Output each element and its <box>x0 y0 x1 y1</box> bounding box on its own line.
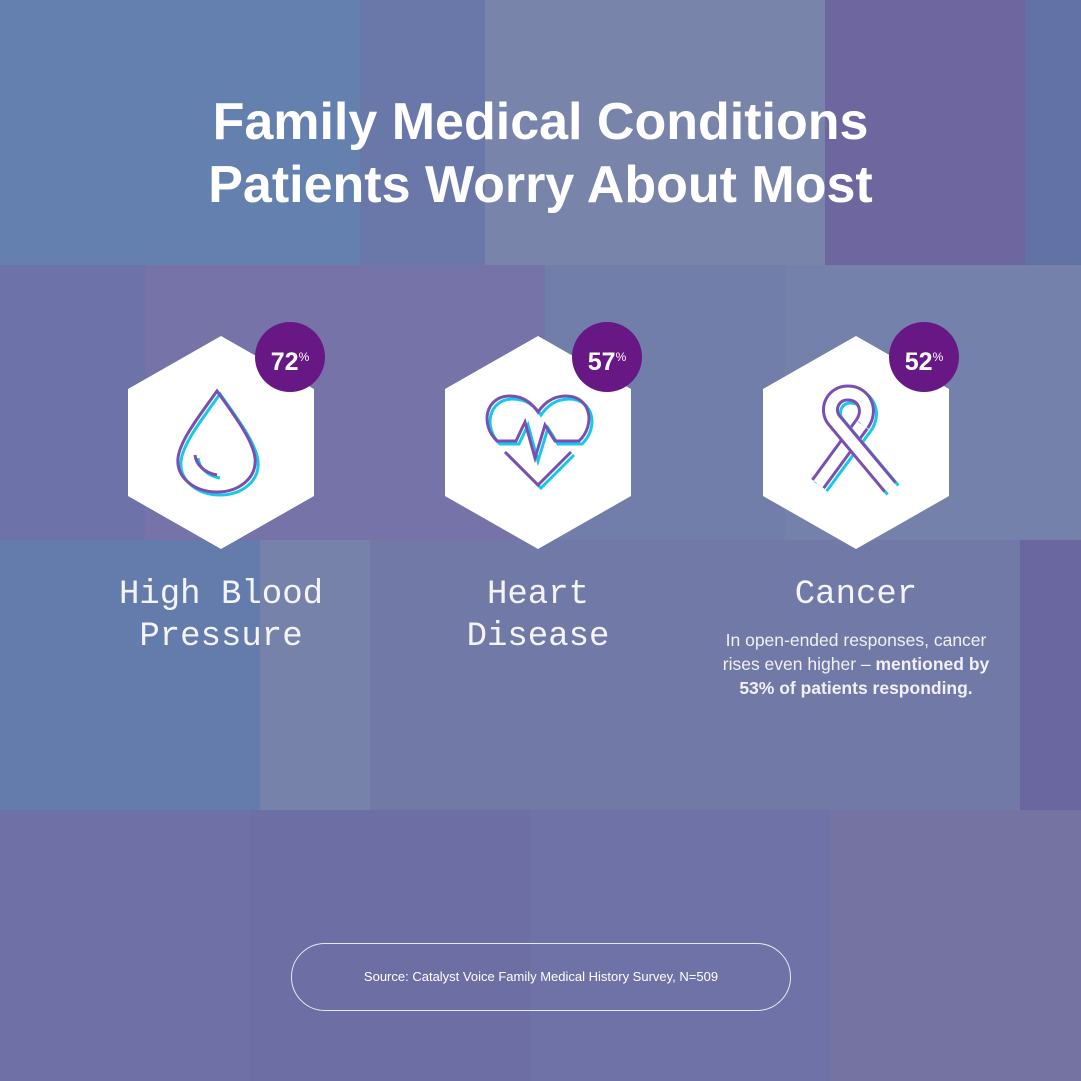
badge: 57% <box>572 322 642 392</box>
title: Family Medical Conditions <box>213 93 868 151</box>
label: Heart <box>487 576 589 614</box>
label: High Blood <box>119 576 323 614</box>
source pill: Source: Catalyst Voice Family Medical History Survey, N=509 <box>364 969 718 984</box>
badge: 52% <box>889 322 959 392</box>
panel: heart disease <box>445 322 642 656</box>
label: Disease <box>467 618 609 656</box>
badge: 52%: 52% <box>905 348 943 376</box>
panel: cancer <box>723 322 990 698</box>
source pill <box>291 943 791 1011</box>
label <box>119 576 323 656</box>
title <box>208 93 873 214</box>
title: Patients Worry About Most <box>208 156 873 214</box>
label: Cancer <box>795 576 917 614</box>
icon: hexagon with ribbon <box>763 336 949 549</box>
badge: 57%: 57% <box>588 348 626 376</box>
badge: 72%: 72% <box>271 348 309 376</box>
note text: In open-ended responses, cancer rises even higher – mentioned by 53% of patients responding. <box>723 630 989 698</box>
icon: hexagon with drop <box>128 336 314 549</box>
panel: high blood pressure <box>119 322 325 656</box>
background patches <box>0 0 360 265</box>
label <box>467 576 609 656</box>
icon: hexagon with heart <box>445 336 631 549</box>
label: Pressure <box>139 618 303 656</box>
badge: 72% <box>255 322 325 392</box>
